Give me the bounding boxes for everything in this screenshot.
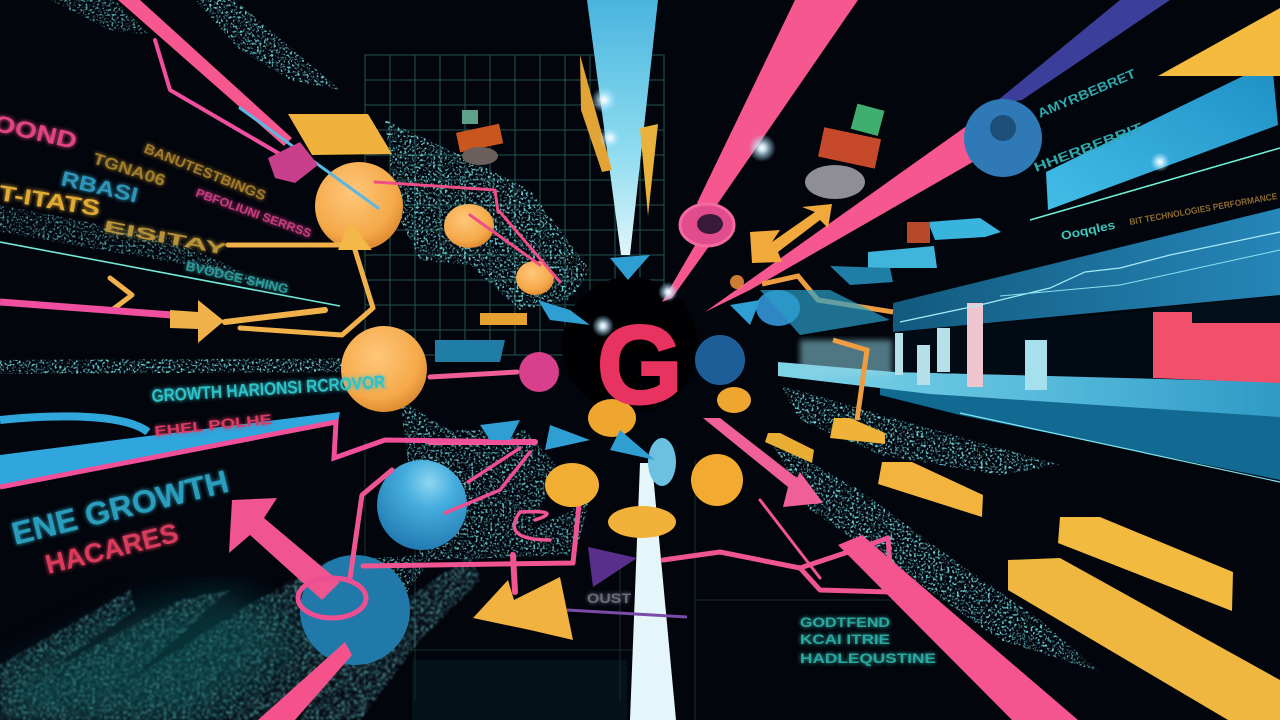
left wall text: RBASI <box>59 167 140 207</box>
robots <box>456 104 930 243</box>
right data wall <box>778 62 1280 482</box>
right data wall: Ooqqles <box>1060 218 1117 243</box>
orange spheres <box>315 162 554 412</box>
bright teal line <box>0 242 340 306</box>
big pink arrow up-left <box>229 498 340 600</box>
left wall text: TGNA06 <box>91 151 167 190</box>
left wall text: BVODGE SHING <box>184 258 290 297</box>
bottom left teal glow <box>0 590 300 720</box>
purple arrow <box>588 547 637 587</box>
left wall text: PBFOLIUNI SERRSS <box>194 186 313 241</box>
pink flow lines <box>350 470 890 592</box>
lower dark blue strip <box>880 380 1280 480</box>
left wall text: HADLEQUSTINE <box>800 650 936 666</box>
yellow arrow left <box>170 300 224 343</box>
yellow parallelogram <box>288 114 392 155</box>
robot: small right <box>907 222 930 243</box>
yellow bars <box>765 418 1280 720</box>
blue and pink pipe <box>0 412 535 487</box>
bottom right pink beam <box>838 535 1078 720</box>
lower centre dark panel <box>412 660 627 720</box>
right data wall: HHERBEBRIT <box>1032 120 1144 175</box>
dark band above pink <box>1155 296 1280 325</box>
left wall text <box>0 110 936 666</box>
blue spheres <box>300 290 800 665</box>
light beams <box>580 0 676 720</box>
chart line <box>900 232 1280 322</box>
left wall text: OUST <box>587 590 632 606</box>
bottom left pink beam <box>258 642 352 720</box>
bright blue strip <box>778 362 1280 417</box>
dark window <box>893 310 1155 378</box>
pink panel <box>1153 312 1280 383</box>
pink ring hub <box>680 204 734 246</box>
center G: G <box>597 304 683 427</box>
top-left pink ribbon hub <box>268 142 318 183</box>
magenta sphere <box>519 352 559 392</box>
yellow arrow upper right <box>750 204 832 263</box>
left wall text: EHEL POLHE <box>154 411 273 439</box>
left network connectors <box>110 40 560 513</box>
purple line <box>567 610 687 617</box>
left wall text: EISITAY <box>102 218 229 259</box>
glow stars <box>591 87 1170 337</box>
blue data band <box>893 208 1280 332</box>
left wall text: BANUTESTBINGS <box>142 140 268 203</box>
yellow wedge top right <box>1158 8 1280 76</box>
orange connector <box>762 276 893 420</box>
pink ring <box>298 578 366 618</box>
pink beams <box>118 0 985 312</box>
robot: top right <box>805 104 884 199</box>
wall labels: AMYRBEBRET <box>1035 66 1138 121</box>
pink pipe <box>0 302 172 315</box>
robot: center top <box>456 110 503 165</box>
lower gold icons <box>473 313 751 640</box>
left wall text: HACARES <box>42 518 181 580</box>
grid panel <box>365 55 960 720</box>
step blocks <box>928 218 1001 240</box>
left wall text: GROWTH HARIONSI RCROVOR <box>151 372 386 406</box>
left wall text: KCAI ITRIE <box>800 631 890 647</box>
central dark void <box>562 277 698 413</box>
left wall text: ENE GROWTH <box>8 463 232 552</box>
data bars <box>895 303 1047 390</box>
left wall text: GODTFEND <box>800 614 890 630</box>
pink arrow diag <box>703 418 823 507</box>
yellow arrow up <box>338 222 372 250</box>
upper blue panel <box>1046 62 1278 210</box>
pale light block <box>800 340 892 376</box>
blue sphere top right <box>964 99 1042 177</box>
top right navy beam <box>992 0 1170 105</box>
blue shards <box>435 255 890 486</box>
perspective lines <box>1030 148 1280 220</box>
